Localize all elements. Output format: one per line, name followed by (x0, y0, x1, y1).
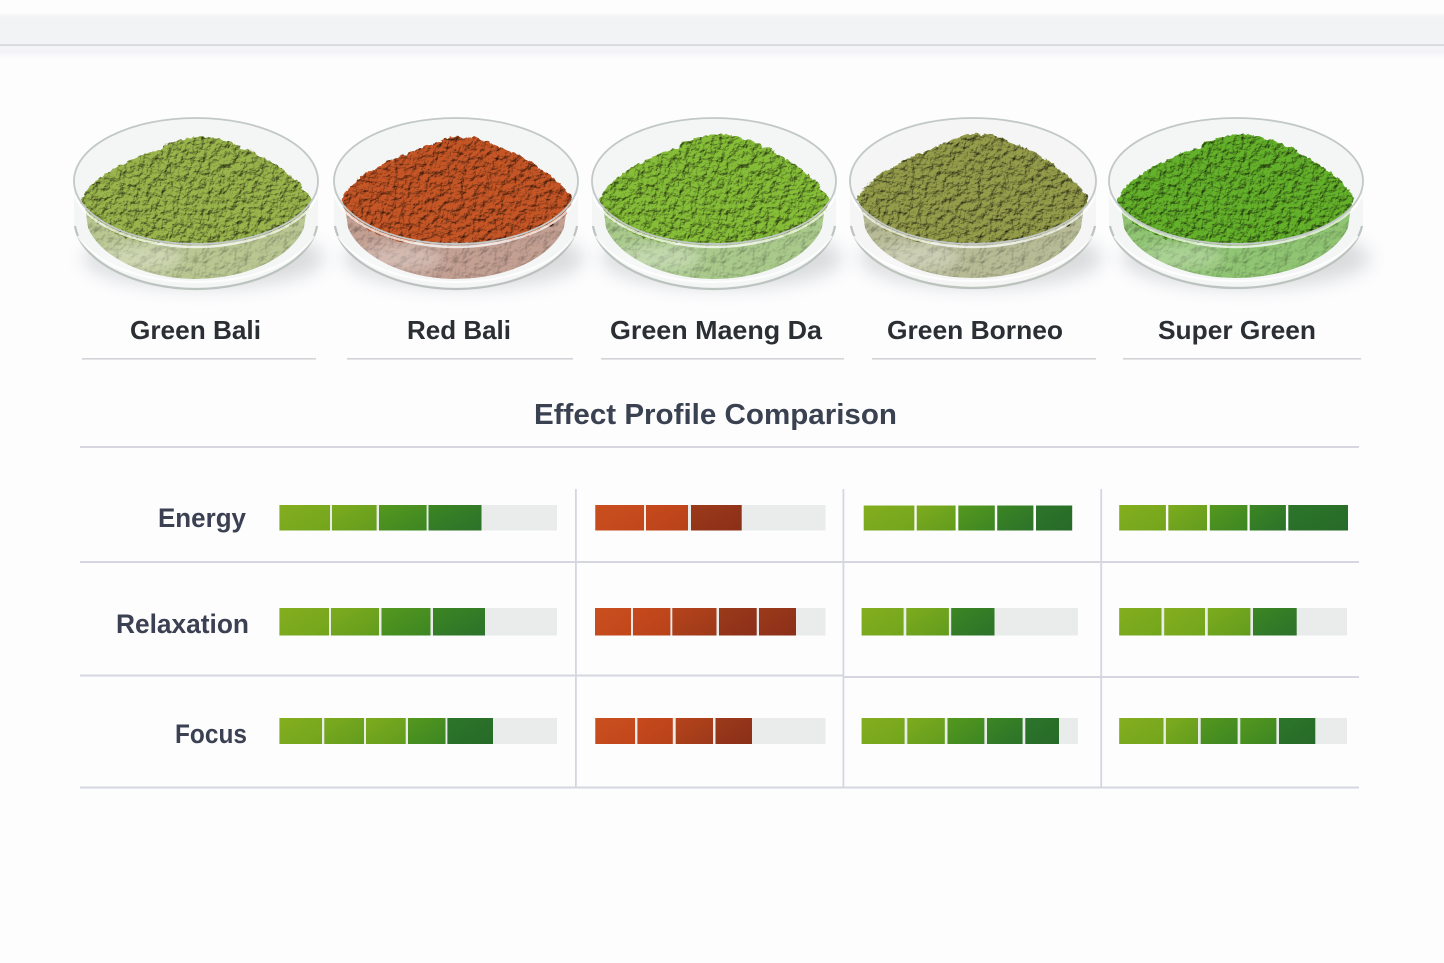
panel: powder dishes (74, 118, 1370, 289)
label: Green Borneo: Green Borneo (887, 315, 1063, 345)
dish: Green Maeng Da powder (592, 118, 842, 289)
label: Red Bali: Red Bali (407, 315, 511, 345)
top shelf band (0, 15, 1444, 54)
row label: Relaxation: Relaxation (116, 609, 249, 639)
panel: strain names (82, 315, 1361, 360)
label: Super Green: Super Green (1158, 315, 1316, 345)
bar: Focus, Green Bali (279, 718, 557, 744)
bar: Relaxation, Green Maeng Da (862, 608, 1078, 636)
label: Green Bali: Green Bali (130, 315, 261, 345)
label: Green Maeng Da: Green Maeng Da (610, 315, 823, 345)
row label: Focus: Focus (175, 719, 247, 749)
heading: Effect Profile Comparison: Effect Profile Comparison (534, 399, 897, 431)
bar: Energy, Green Bali (279, 505, 557, 530)
bar: Energy, Super Green (1119, 505, 1348, 530)
dish: Green Bali powder (74, 118, 324, 289)
dish: Green Borneo powder (850, 118, 1102, 288)
bar: Relaxation, Red Bali (595, 608, 826, 636)
bar: Energy, Green Maeng Da (864, 506, 1072, 530)
row label: Energy: Energy (158, 503, 246, 533)
bar: Relaxation, Super Green (1119, 608, 1347, 636)
bar: Focus, Super Green (1119, 718, 1347, 744)
panel: comparison table (80, 446, 1359, 788)
bar: Focus, Red Bali (595, 718, 826, 744)
dish: Red Bali powder (334, 118, 584, 289)
dish: Super Green powder (1109, 118, 1370, 288)
table grid lines (80, 446, 1359, 788)
bar: Relaxation, Green Bali (279, 608, 557, 636)
bar: Focus, Green Maeng Da (862, 718, 1078, 744)
bar: Energy, Red Bali (595, 505, 826, 530)
